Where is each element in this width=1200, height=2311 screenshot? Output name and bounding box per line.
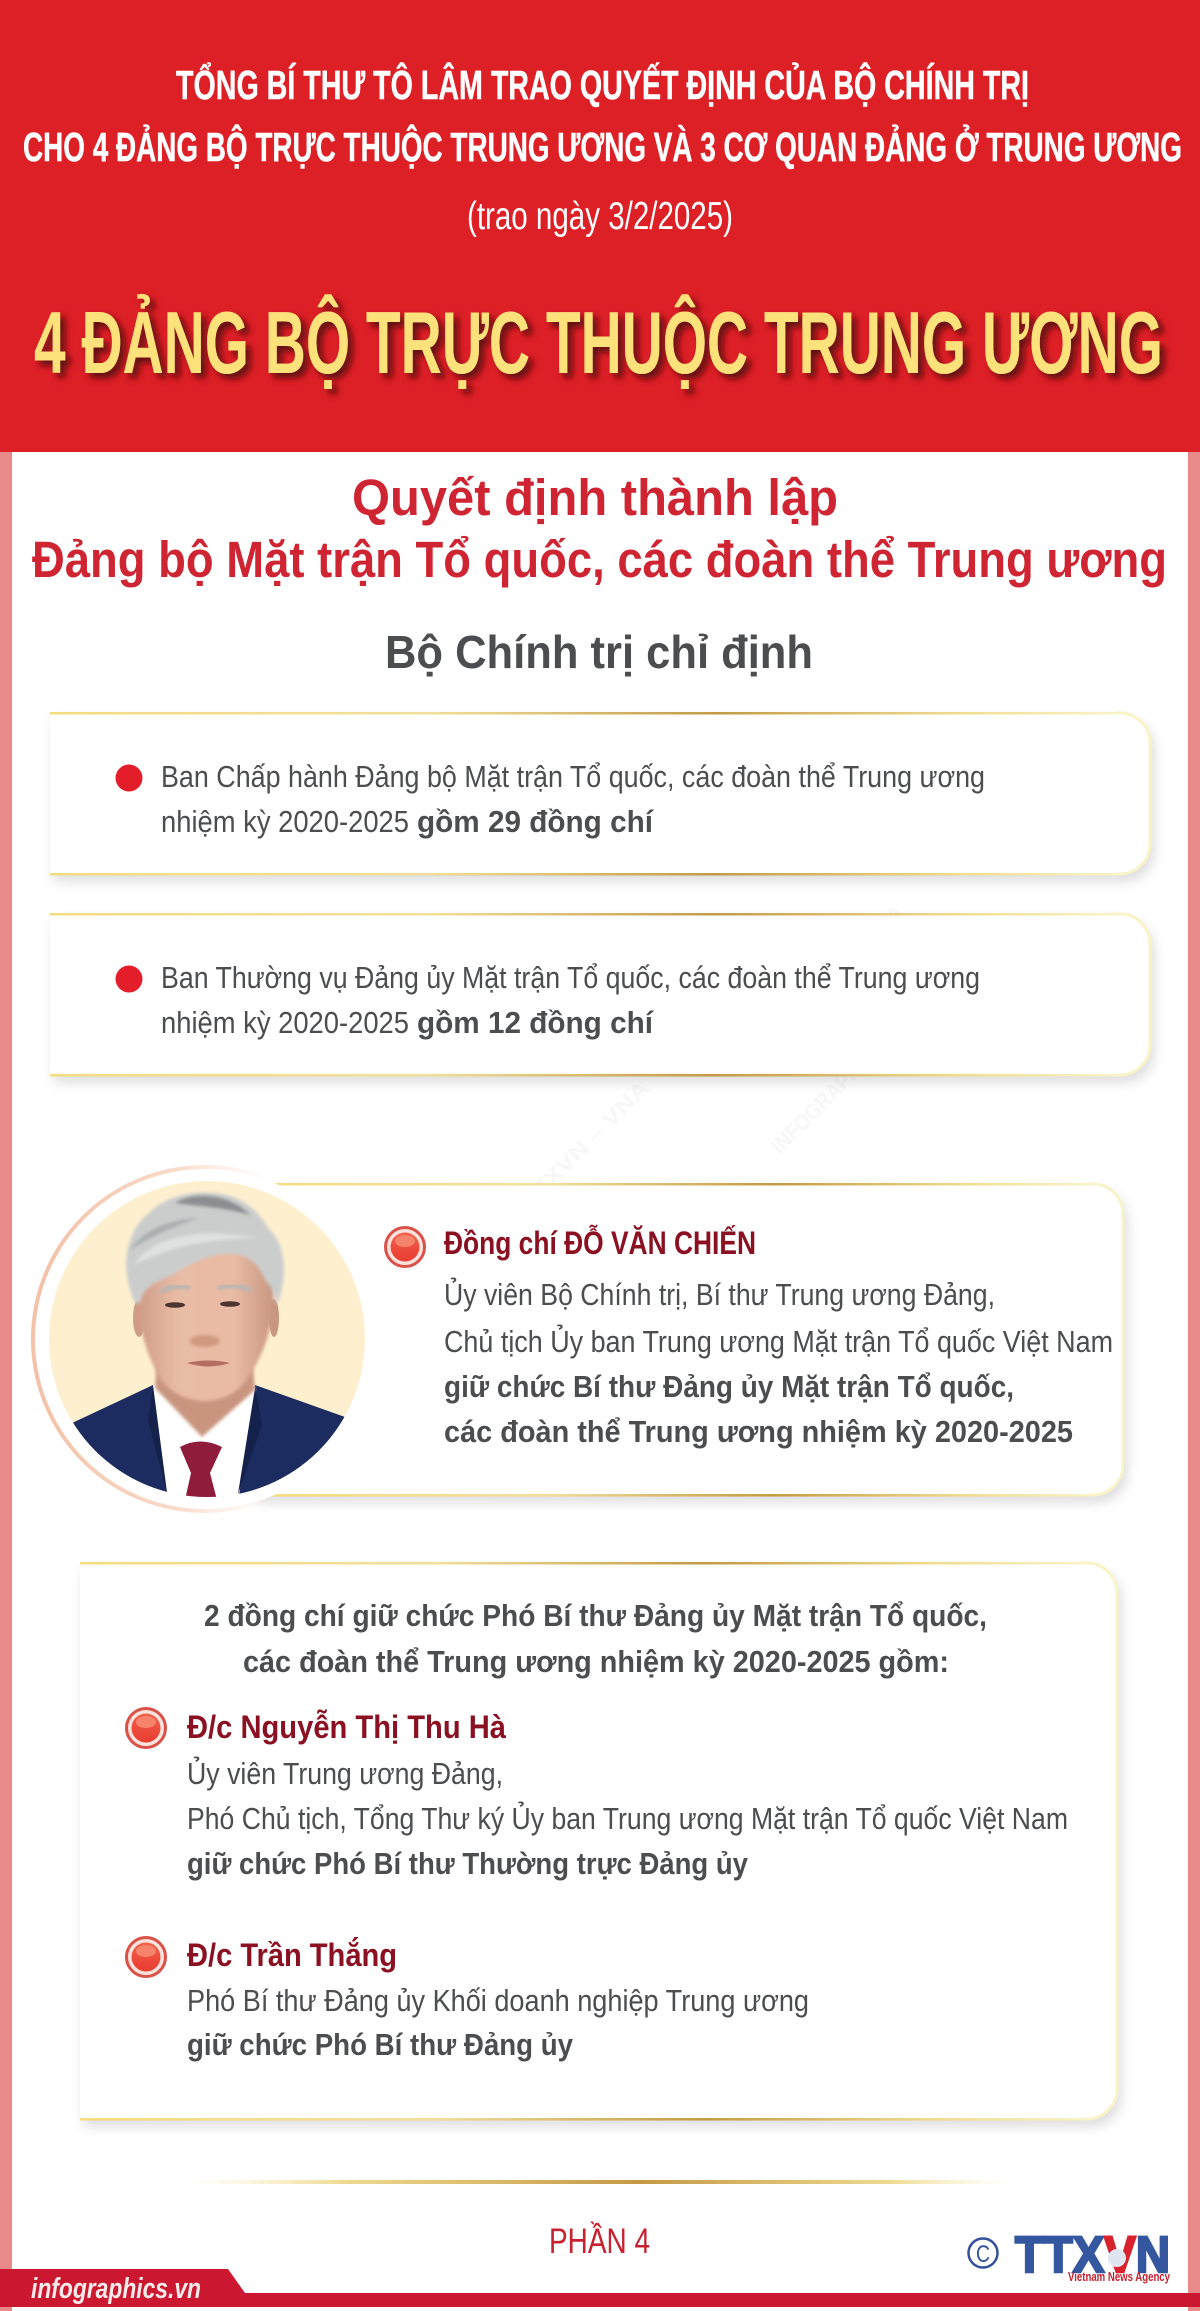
wordmark: TTXVN xyxy=(1015,2226,1170,2283)
ears xyxy=(133,1301,144,1337)
role text: giữ chức Bí thư Đảng ủy Mặt trận Tổ quốc, xyxy=(444,1369,1014,1404)
panel: deputy secretaries card xyxy=(80,1562,1117,2120)
deputy 2: Đ/c Trần Thắng xyxy=(187,1937,397,1973)
nose xyxy=(190,1335,220,1347)
text: nhiệm kỳ 2020-2025 xyxy=(161,804,409,839)
portrait xyxy=(33,1167,380,1511)
text: Ban Thường vụ Đảng ủy Mặt trận Tổ quốc, các đoàn thể Trung ương xyxy=(161,960,980,995)
watermarks: INFOGRAPHICS xyxy=(586,950,710,1074)
portrait ring xyxy=(33,1167,377,1511)
copyright mark xyxy=(968,2238,998,2268)
role text: Ủy viên Bộ Chính trị, Bí thư Trung ương Đảng, xyxy=(444,1276,995,1312)
icon: bullet 1 xyxy=(126,1708,166,1748)
header band xyxy=(0,0,1200,452)
text: Ban Chấp hành Đảng bộ Mặt trận Tổ quốc, các đoàn thể Trung ương xyxy=(161,759,985,794)
text: nhiệm kỳ 2020-2025 xyxy=(161,1005,409,1040)
hair xyxy=(126,1192,284,1305)
deputy 1: Ủy viên Trung ương Đảng, xyxy=(187,1755,503,1791)
deputy 1: Đ/c Nguyễn Thị Thu Hà xyxy=(187,1709,506,1745)
deputy 1: giữ chức Phó Bí thư Thường trực Đảng ủy xyxy=(187,1846,749,1881)
bullet xyxy=(116,764,142,792)
watermarks: TTXVN – VNA xyxy=(786,900,910,1024)
bullet xyxy=(116,966,142,992)
suit xyxy=(73,1385,167,1492)
icon: bullet 2 xyxy=(126,1938,166,1976)
copyright mark: C xyxy=(976,2241,990,2268)
face xyxy=(138,1245,274,1401)
footer site name: infographics.vn xyxy=(31,2273,201,2305)
shirt xyxy=(153,1385,255,1500)
deputy 1 xyxy=(187,1709,1068,1881)
panel: card standing committee xyxy=(50,913,1150,1076)
part label: PHẦN 4 xyxy=(549,2221,650,2261)
deputy 2 xyxy=(187,1937,809,2062)
date: (trao ngày 3/2/2025) xyxy=(467,195,733,238)
logo: TTXVN xyxy=(968,2226,1171,2284)
card heading: các đoàn thể Trung ương nhiệm kỳ 2020-2025 gồm: xyxy=(243,1644,949,1679)
deputy 2: giữ chức Phó Bí thư Đảng ủy xyxy=(187,2027,574,2062)
text xyxy=(161,759,985,839)
card heading: 2 đồng chí giữ chức Phó Bí thư Đảng ủy Mặt trận Tổ quốc, xyxy=(204,1598,987,1633)
text: gồm 29 đồng chí xyxy=(417,804,654,839)
deputy 2: Phó Bí thư Đảng ủy Khối doanh nghiệp Trung ương xyxy=(187,1983,809,2018)
deputy 1: Phó Chủ tịch, Tổng Thư ký Ủy ban Trung ương Mặt trận Tổ quốc Việt Nam xyxy=(187,1800,1068,1836)
heading line 1: Quyết định thành lập xyxy=(352,469,838,526)
neck xyxy=(155,1360,255,1437)
mouth xyxy=(187,1360,230,1366)
watermarks: INFOGRAPHICS xyxy=(766,1035,890,1159)
role text xyxy=(444,1276,1113,1449)
watermarks: TTXVN – VNA xyxy=(516,1076,654,1214)
eyes xyxy=(165,1302,185,1308)
watermarks: INFOGRAPHICS xyxy=(271,910,395,1034)
icon: bullet xyxy=(386,1228,424,1266)
watermarks xyxy=(271,900,910,1214)
brows xyxy=(160,1286,190,1292)
role text: các đoàn thể Trung ương nhiệm kỳ 2020-2025 xyxy=(444,1414,1073,1449)
text xyxy=(161,960,980,1040)
panel: card executive committee xyxy=(50,712,1150,876)
card heading xyxy=(204,1598,987,1679)
tie xyxy=(180,1442,222,1500)
section heading xyxy=(32,469,1167,588)
role text: Chủ tịch Ủy ban Trung ương Mặt trận Tổ quốc Việt Nam xyxy=(444,1323,1113,1359)
name: Đồng chí ĐỖ VĂN CHIẾN xyxy=(444,1225,756,1261)
text: gồm 12 đồng chí xyxy=(417,1005,654,1040)
footer band xyxy=(0,2269,1200,2307)
panel: secretary card xyxy=(252,1183,1123,1496)
subheading: Bộ Chính trị chỉ định xyxy=(385,626,813,678)
globe xyxy=(1108,2249,1126,2267)
portrait photo xyxy=(49,1181,365,1497)
divider xyxy=(180,2180,1014,2184)
